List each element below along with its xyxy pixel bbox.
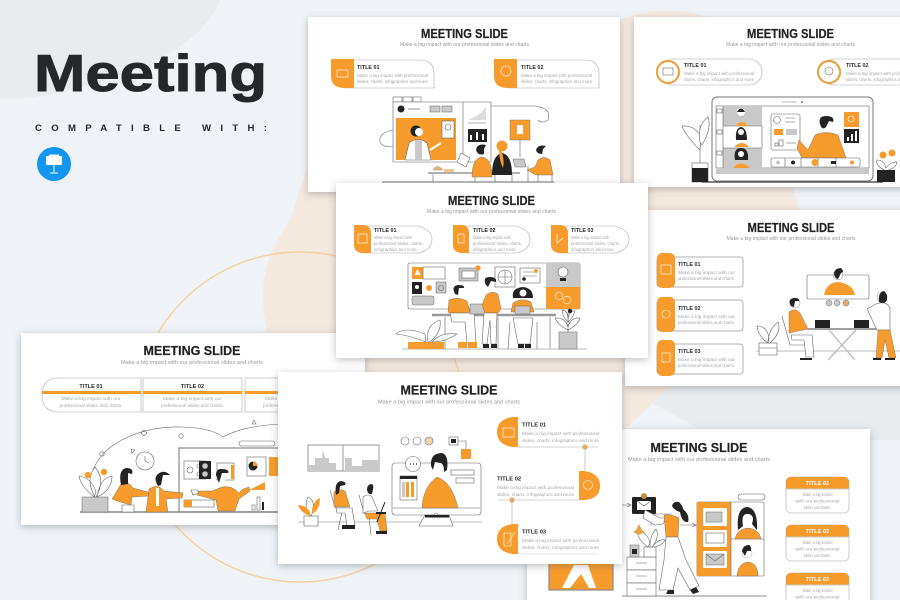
card: title 03: TITLE 03 [283,384,306,390]
card: title 02: TITLE 02 [521,65,543,71]
card: title 02: professional slides and charts. [678,320,735,325]
card: title 02: TITLE 02 [846,63,868,69]
card: title 01: Make a big impact with our [678,270,736,275]
heading: slide 3: MEETING SLIDE [448,194,535,208]
card: title 02: slides, charts, infographics and more [521,79,592,84]
card: title 02: Make a big impact with [473,235,511,240]
card: title 02: Make a big impact with our [678,314,736,319]
panel: slide 3 [336,183,648,358]
heading: slide 1: MEETING SLIDE [421,27,508,41]
card: title 03: professional slides and charts. [263,403,326,408]
panel: slide 6 [278,372,622,564]
item: title 01: slides, charts, infographics and more [522,438,600,443]
card: title 03 [245,378,344,412]
card: title 01: professional slides and charts. [60,403,122,408]
card: title 03: professional slides and charts. [678,363,735,368]
heading: slide 4: MEETING SLIDE [748,221,834,235]
card: title 01: with our professional [796,498,840,504]
card: title 01 [657,59,762,85]
text: compatible with: COMPATIBLE WITH: [35,123,267,134]
subtitle: slide 3: Make a big impact with our professional slides and charts [427,209,556,215]
illustration: table discussion [757,268,900,360]
card: title 03: TITLE 03 [806,577,829,583]
illustration: video meeting [380,97,554,182]
card: title 01: TITLE 01 [678,262,700,268]
background blob: lower right [620,386,900,440]
card: title 02: professional slides, charts, [473,241,522,246]
card: title 03: TITLE 03 [571,228,593,234]
card: title 02: slides and charts. [804,553,831,558]
card: title 01: Make a big impact with [374,235,412,240]
item: title 03: TITLE 03 [522,530,547,536]
illustration: remote meeting [622,493,767,596]
card: title 02: Make a big impact [802,540,833,545]
item: title 02: Make a big impact with professional [497,485,574,490]
panel: slide 2 [634,17,900,187]
heading: slide 6: MEETING SLIDE [400,384,498,398]
card: title 02: Make a big impact with professional [521,73,592,78]
card: title 01: Make a big impact with professional [684,71,754,76]
card: title 02 [494,59,599,88]
illustration: team at screen [79,420,289,512]
card: title 01: Make a big impact with our [62,396,121,401]
card: title 01 [657,253,743,288]
subtitle: slide 4: Make a big impact with our professional slides and charts [726,236,856,242]
item: title 01: Make a big impact with professional [522,431,599,436]
card: title 03: with our professional [796,594,840,600]
card: title 01 [354,225,432,253]
panel: slide 7 [527,429,870,600]
item: title 01 [497,417,600,450]
connector lines [512,447,585,524]
subtitle: slide 7: Make a big impact with our professional slides and charts [628,457,770,463]
background ring [135,252,465,582]
card: title 02: infographics and more. [473,247,517,252]
card: title 01: infographics and more. [374,247,418,252]
card: title 01: TITLE 01 [684,63,706,69]
item: title 03 [497,524,600,554]
illustration: team at desk [396,263,587,349]
panel: slide 1 [308,17,620,192]
icon: keynote [37,147,71,181]
item: title 03: Make a big impact with professional [522,538,599,543]
card: title 03: professional slides, charts, [571,241,620,246]
card: title 01 [42,378,141,412]
card: title 03: Make a big impact with our [678,357,736,362]
illustration: laptop video call [682,97,897,182]
card: title 02 [786,525,849,561]
card: title 02: professional slides and charts. [161,403,224,408]
card: title 01: TITLE 01 [374,228,396,234]
card: title 03: Make a big impact with [571,235,609,240]
card: title 01: TITLE 01 [357,65,379,71]
background blob: peach [263,11,801,540]
card: title 02: TITLE 02 [678,306,700,312]
item: title 01: TITLE 01 [522,422,547,428]
illustration: audience and presenter [298,437,482,535]
card: title 02 [453,225,530,253]
subtitle: slide 2: Make a big impact with our professional slides and charts [726,42,855,48]
card: title 01: slides and charts. [804,505,831,510]
card: title 03 [657,340,743,376]
panel: slide 5 [21,333,365,525]
card: title 01: professional slides, charts, [374,241,423,246]
item: title 02: slides, charts, infographics and more [497,492,575,497]
item: title 03: slides, charts, infographics and more [522,545,600,550]
heading: slide 5: MEETING SLIDE [144,344,240,358]
heading: slide 2: MEETING SLIDE [747,27,834,41]
card: title 03: Make a big impact with our [265,396,325,401]
card: title 01: professional slides and charts. [678,276,735,281]
card: title 01: TITLE 01 [79,384,103,390]
card: title 02 [143,378,242,412]
card: title 03 [786,573,849,600]
panel: slide 4 [625,210,900,386]
card: title 01: slides, charts, infographics and more [684,77,754,82]
card: title 01 [786,477,849,513]
card: title 02: TITLE 02 [806,529,829,535]
heading: Meeting: Meeting [34,45,267,103]
card: title 01 [331,59,434,88]
card: title 02 [657,297,743,332]
card: title 01: Make a big impact [802,492,833,497]
subtitle: slide 6: Make a big impact with our professional slides and charts [378,400,520,406]
heading: slide 7: MEETING SLIDE [650,441,748,455]
subtitle: slide 1: Make a big impact with our professional slides and charts [400,42,529,48]
card: title 03: Make a big impact [802,588,833,593]
item: title 02: TITLE 02 [497,476,521,482]
card: title 02: TITLE 02 [473,228,495,234]
illustration: framed figure [549,555,613,590]
card: title 02: with our professional [796,546,840,552]
subtitle: slide 5: Make a big impact with our professional slides and charts [121,360,263,366]
card: title 03 [551,225,629,253]
card: title 03: infographics and more. [571,247,615,252]
card: title 02 [818,59,900,85]
card: title 02: TITLE 02 [181,384,204,390]
item: title 02 [497,471,600,503]
card: title 01: slides, charts, infographics and more [357,79,428,84]
card: title 03: TITLE 03 [678,349,700,355]
card: title 01: TITLE 01 [806,481,829,487]
card: title 01: Make a big impact with professional [357,73,428,78]
background blob: top left [0,0,220,98]
card: title 02: Make a big impact with our [163,396,223,401]
